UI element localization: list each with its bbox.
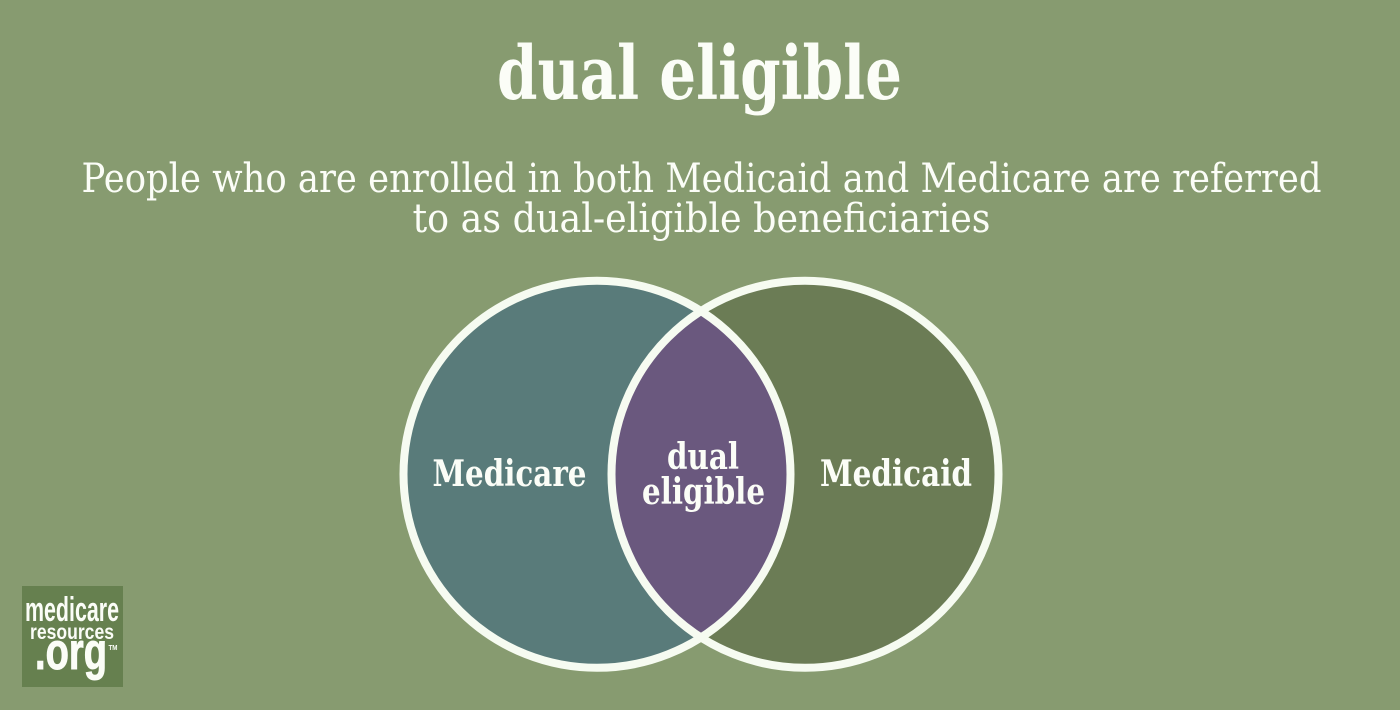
outline: Medicaid circle [612,281,998,668]
circle: Medicaid [612,281,998,668]
label: Medicaid: Medicaid [820,453,972,495]
label: Medicare: Medicare [432,453,586,495]
logo: medicareresources.org: .org [35,623,107,681]
subtitle text [82,156,1322,242]
overlap: dual eligible [611,311,791,638]
venn diagram [404,281,998,668]
title: dual eligible [497,31,902,117]
logo: medicareresources.org: TM [108,645,118,652]
outline: Medicare circle [404,281,790,668]
label: dual eligible: eligible [642,471,765,513]
logo: medicareresources.org [22,586,123,687]
circle: Medicare [404,281,790,668]
logo: medicareresources.org: medicare [25,591,119,629]
subtitle text: to as dual-eligible beneficiaries [412,196,990,242]
label: dual eligible: dual [667,436,739,478]
label: dual eligible [642,436,765,513]
logo: medicareresources.org: resources [30,621,114,644]
